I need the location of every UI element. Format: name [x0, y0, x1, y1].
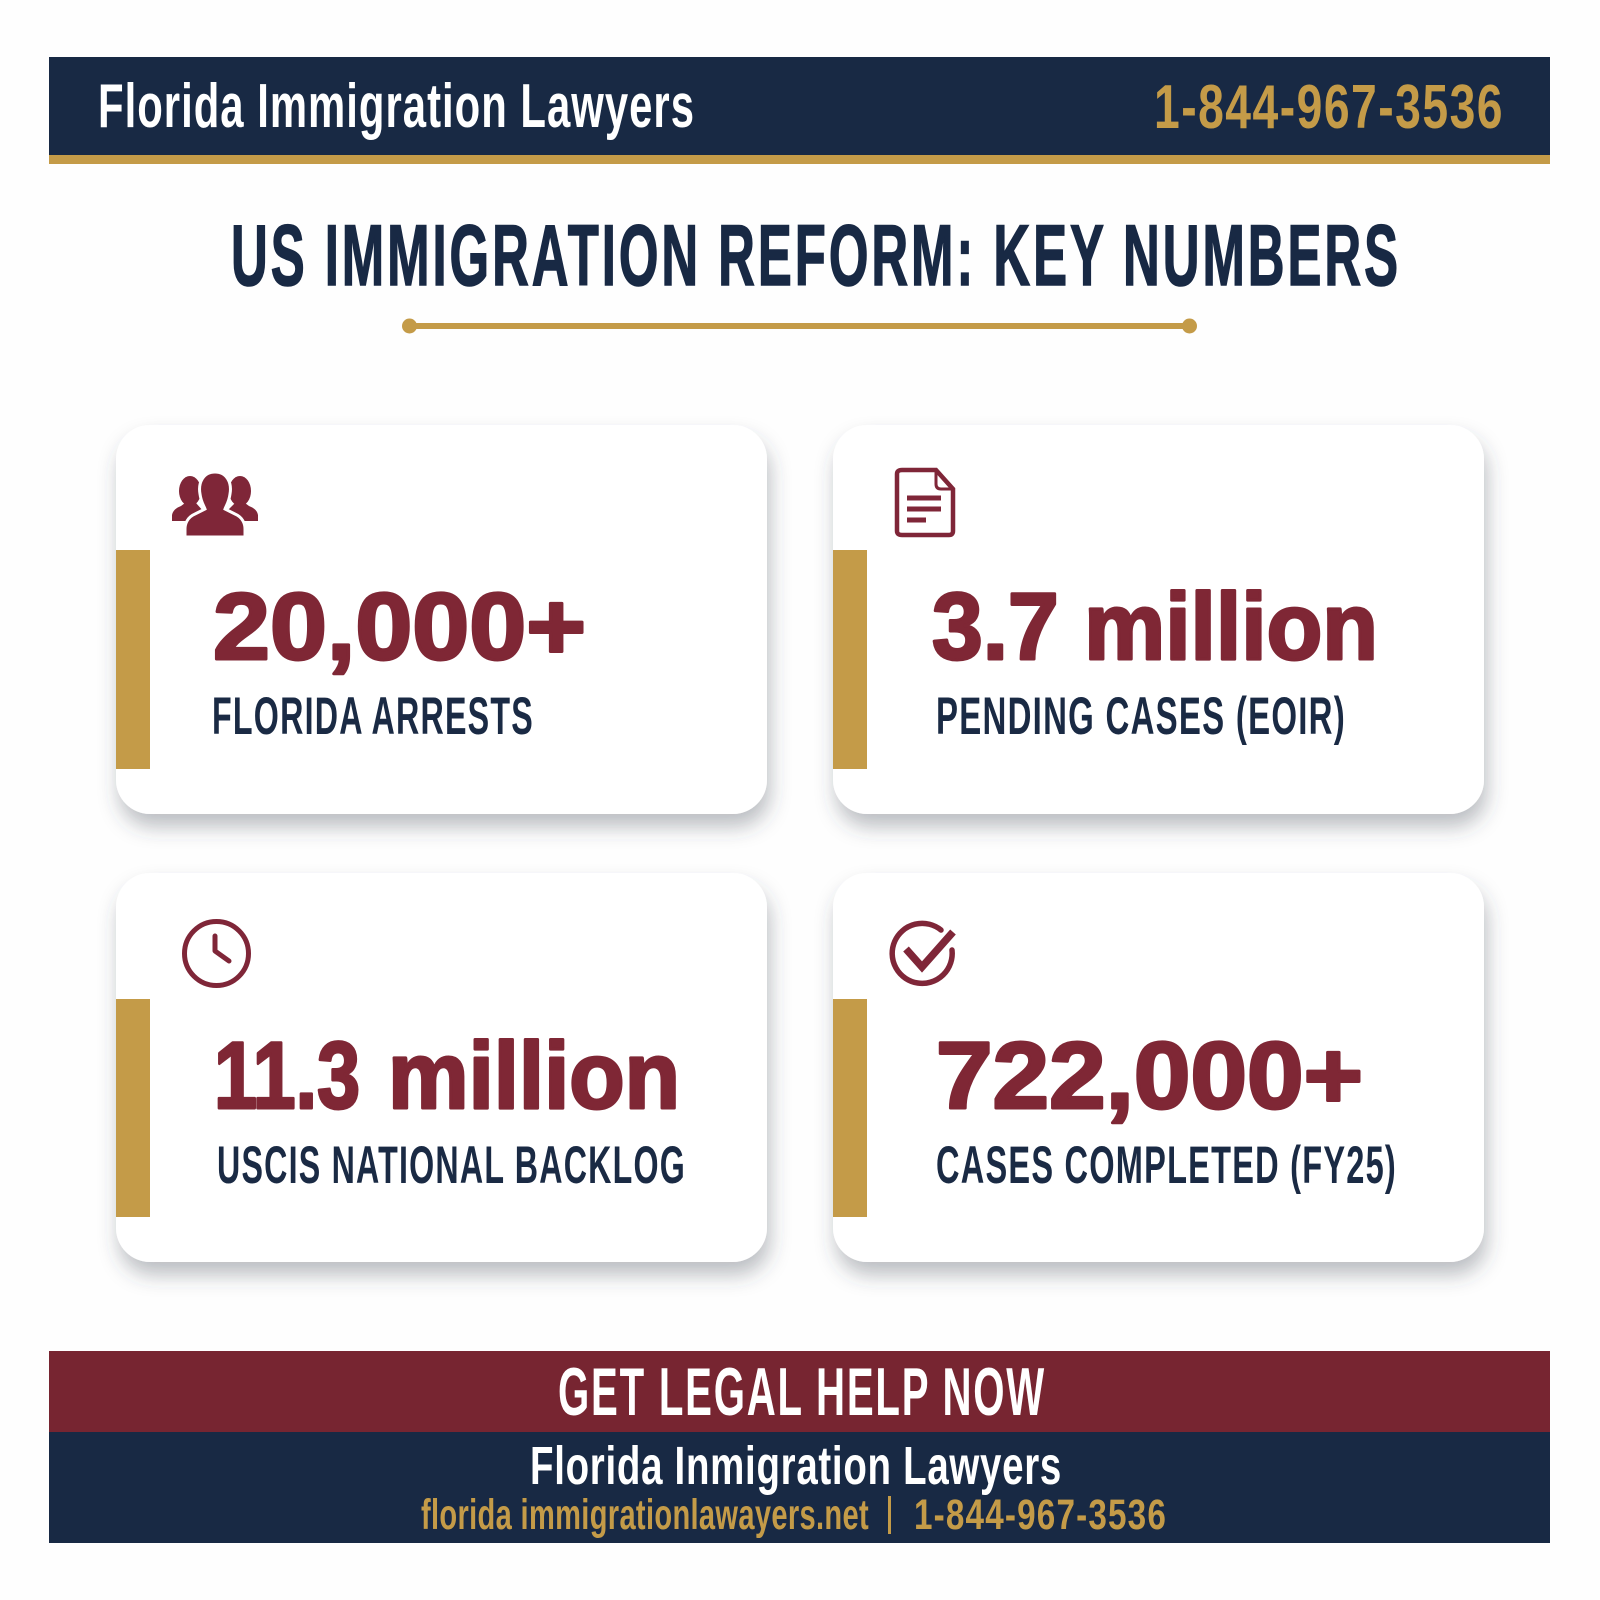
- gold accent bar: [833, 550, 867, 769]
- statistic: million: [388, 1023, 680, 1129]
- panel: USCIS backlog: [116, 873, 767, 1262]
- panel: Florida arrests: [116, 425, 767, 814]
- call to action banner: [49, 1351, 1550, 1432]
- statistic: [214, 1023, 680, 1129]
- call to action heading: GET LEGAL HELP NOW: [558, 1354, 1046, 1430]
- gold accent bar: [116, 550, 150, 769]
- title divider: [402, 318, 1197, 334]
- footer contact panel: [49, 1432, 1550, 1543]
- footer firm name: Florida Inmigration Lawyers: [530, 1436, 1062, 1496]
- header firm name: Florida Immigration Lawyers: [98, 72, 695, 141]
- statistic label: FLORIDA ARRESTS: [212, 687, 534, 746]
- icon: document: [897, 470, 953, 535]
- icon: check circle: [892, 923, 953, 983]
- header banner: [49, 57, 1550, 164]
- footer phone number: 1-844-967-3536: [914, 1491, 1167, 1539]
- gold accent bar: [116, 999, 150, 1217]
- statistic: 722,000+: [936, 1023, 1363, 1129]
- icon: people: [172, 472, 258, 537]
- gold accent bar: [833, 999, 867, 1217]
- statistic: 20,000+: [213, 574, 586, 680]
- statistic label: USCIS NATIONAL BACKLOG: [217, 1136, 686, 1195]
- panel: pending cases: [833, 425, 1484, 814]
- statistic label: PENDING CASES (EOIR): [936, 687, 1346, 746]
- footer website: florida immigrationlawayers.net: [421, 1491, 869, 1539]
- icon: clock: [184, 922, 248, 986]
- statistic: 11.3: [214, 1023, 360, 1129]
- statistic: 3.7 million: [932, 574, 1378, 680]
- panel: cases completed: [833, 873, 1484, 1262]
